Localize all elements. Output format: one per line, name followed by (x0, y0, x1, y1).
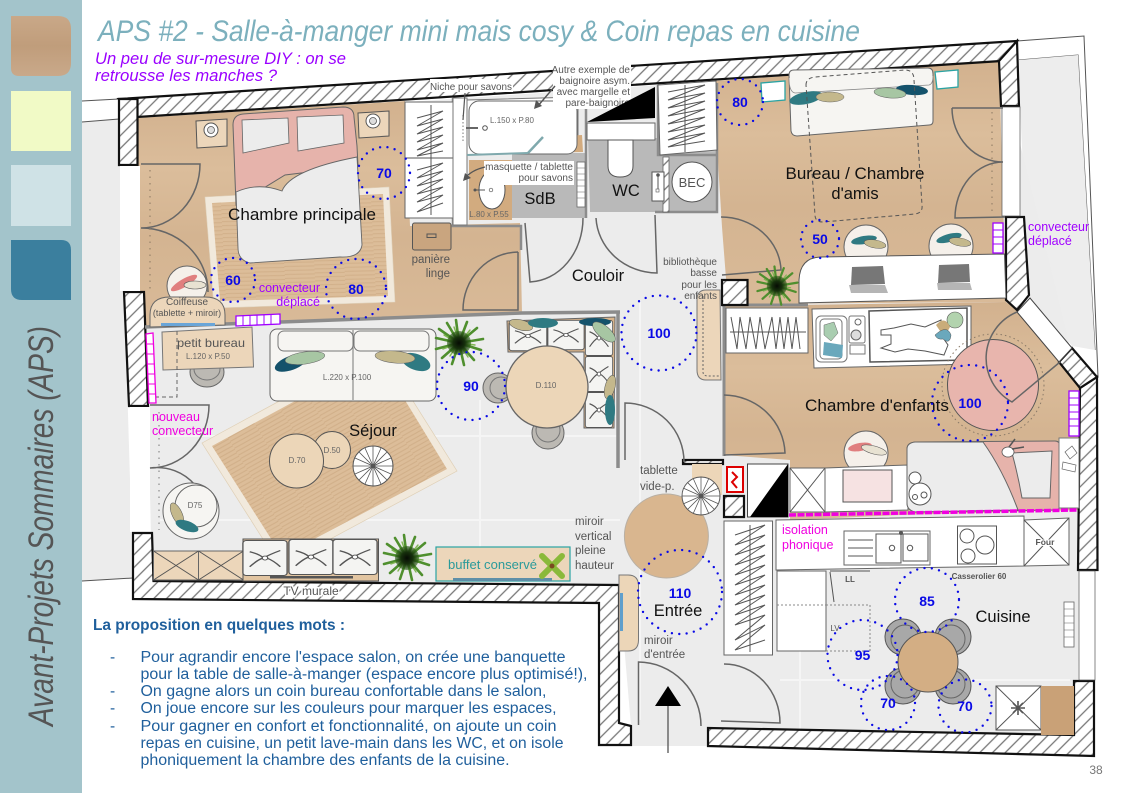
note: mirror (575, 516, 614, 572)
note: shelf (640, 465, 678, 493)
sidebar (0, 0, 82, 793)
note: other bathtub example: Autre exemple de (552, 65, 630, 76)
room label: Chambre principale (228, 206, 376, 224)
heading: La proposition en quelques mots : (93, 617, 345, 634)
list: Pour gagner en confort et fonctionnalité, on ajoute un coin (140, 718, 556, 735)
note: shelf: vide-p. (640, 481, 675, 493)
clearance 80 (717, 79, 763, 125)
exterior ground (82, 36, 1098, 581)
tall units (777, 571, 870, 651)
right wall (1078, 377, 1098, 570)
clearance 70: 70 (376, 165, 392, 181)
door to office (721, 217, 781, 275)
list: Pour agrandir encore l'espace salon, on crée une banquette (140, 649, 566, 666)
clearance 95: 95 (855, 647, 870, 663)
clearance 100 (932, 365, 1008, 441)
interior floor (140, 62, 1080, 746)
vertical section title: Avant-Projets Sommaires (APS) (22, 326, 61, 728)
list: - (110, 683, 115, 700)
WC (525, 81, 717, 282)
note: other bathtub example (534, 64, 631, 109)
round rug (624, 494, 708, 578)
left wall (124, 292, 148, 406)
dressing table: (tablette + miroir) (153, 308, 221, 318)
door to kitchen (721, 664, 780, 723)
clearance 85: 85 (919, 593, 935, 609)
note: bookcase: bibliothèque (663, 257, 717, 268)
note: mirror: hauteur (575, 560, 614, 572)
note: isolation (782, 523, 833, 552)
hob (958, 526, 996, 564)
pouf (353, 446, 393, 486)
note: moved convector (259, 281, 320, 309)
clearance 70 right (938, 680, 992, 732)
laundry basket (412, 223, 451, 280)
plant (757, 266, 797, 305)
oven (1024, 518, 1069, 566)
low bookcase (697, 290, 721, 380)
clearance 90 (437, 352, 505, 420)
note: other bathtub example: baignoire asym. (559, 76, 630, 87)
bathroom (430, 64, 631, 225)
note: isolation: phonique (782, 538, 833, 552)
clearance 70 left: 70 (880, 695, 896, 711)
closet (726, 308, 808, 353)
note: niche (430, 79, 513, 120)
sofa: L.220 x P.100 (323, 373, 372, 382)
TV bench (243, 539, 378, 581)
appliance marks: Casserolier 60 (952, 572, 1007, 581)
lower-left and bottom wall (133, 533, 631, 745)
room label: Chambre d'enfants (805, 397, 949, 415)
doors (952, 108, 1005, 218)
coffee table D50: D.50 (324, 446, 341, 455)
title: APS #2 - Salle-à-manger mini mais cosy & Coin repas en cuisine (96, 15, 860, 48)
room label: d'amis (831, 185, 879, 203)
proposal text block (93, 617, 588, 769)
list: On gagne alors un coin bureau confortable dans le salon, (140, 683, 546, 700)
wood floor: main bedroom (138, 101, 522, 327)
round rug (942, 334, 1044, 436)
sink (844, 531, 930, 565)
entry arrow (655, 686, 681, 753)
child bed (907, 441, 1060, 512)
diagonal wall (1059, 348, 1097, 388)
radiator (1064, 602, 1074, 647)
doors (141, 164, 208, 292)
internal partition (145, 312, 620, 327)
clearance 70 (358, 147, 410, 199)
small desk: petit bureau (177, 336, 245, 350)
ladder radiator (577, 162, 585, 207)
storage cabinets (154, 551, 244, 580)
list: - (110, 649, 115, 666)
note: bookcase: enfants (684, 291, 717, 302)
window door (986, 312, 1060, 402)
dining table (506, 346, 588, 428)
clearance 100: 100 (647, 325, 671, 341)
black shaft (587, 87, 655, 122)
appliance marks (830, 571, 1007, 633)
sideboard (436, 547, 570, 581)
wood cabinet (1041, 686, 1074, 735)
corridor (572, 217, 781, 380)
convector (1069, 391, 1079, 436)
subtitle (95, 50, 346, 85)
boiler unit (996, 686, 1041, 730)
dining chairs (885, 619, 971, 704)
small desk chair (190, 357, 224, 387)
colour swatch: pale yellow (11, 91, 71, 151)
walls (119, 41, 1098, 756)
clearance 100 (622, 296, 696, 370)
dashed desk footprint (155, 331, 177, 397)
small desk (161, 323, 254, 370)
colour swatch: deep blue (11, 240, 71, 300)
room label: Bureau / Chambre (786, 165, 924, 183)
armchair D75 (163, 483, 219, 539)
note: bookcase (663, 257, 717, 302)
dining chairs (483, 373, 564, 449)
grey tile floor: bathroom (512, 153, 587, 218)
grey tile floor: WC (588, 138, 717, 212)
clearance 110: 110 (669, 585, 692, 601)
list: phoniquement la chambre des enfants de la cuisine. (140, 752, 510, 769)
pouf (682, 477, 720, 515)
children's room (724, 306, 1079, 515)
right wall upper (1006, 217, 1029, 310)
shelf (692, 464, 722, 495)
fire/riser icon (727, 467, 743, 492)
fold-out outline (806, 70, 922, 222)
clearance 50 (801, 220, 839, 258)
plant (436, 320, 483, 365)
wood floor: children's room (724, 302, 1080, 520)
note: mirror: pleine (575, 545, 606, 557)
clearance 80: 80 (732, 94, 748, 110)
clearance 110 (638, 550, 722, 634)
oven: Four (1036, 537, 1055, 547)
note: bookcase: basse (690, 268, 717, 279)
page number: 38 (1089, 763, 1103, 777)
appliance marks: LL (845, 575, 855, 584)
note: shelf: tablette (640, 465, 678, 477)
note: moved convector: déplacé (1028, 234, 1072, 248)
note: moved convector: déplacé (276, 295, 320, 309)
note: soap shelf: pour savons (519, 173, 573, 184)
sideboard: buffet conservé (448, 558, 537, 572)
colour swatch: pale blue (11, 165, 71, 226)
coffee table D70 (270, 434, 324, 488)
sofa (270, 329, 436, 401)
list: repas en cuisine, un petit lave-main dans les WC, et on isole (140, 735, 564, 752)
subtitle: retrousse les manches ? (95, 67, 278, 85)
room label (786, 165, 924, 203)
note: moved convector (1028, 220, 1089, 248)
dressing table: Coiffeuse (166, 297, 208, 308)
bathtub: L.150 x P.80 (490, 116, 534, 125)
doors (150, 405, 209, 485)
chairs (844, 224, 973, 269)
clearance 85 (895, 568, 959, 632)
rug (202, 347, 457, 566)
list: On joue encore sur les couleurs pour marquer les espaces, (140, 700, 556, 717)
bathtub (453, 97, 583, 225)
desk chair (844, 431, 888, 475)
list: - (110, 718, 115, 735)
top-right wall (999, 41, 1019, 106)
mirror console (619, 575, 638, 651)
clearance 80 (326, 259, 386, 319)
closet (658, 81, 717, 155)
note: soap shelf: masquette / tablette (485, 162, 573, 173)
list (110, 649, 588, 769)
laundry basket: panière (412, 254, 450, 266)
hand basin (652, 157, 669, 212)
room label: WC (612, 182, 640, 200)
technical ducts (727, 464, 788, 517)
sink: L.80 x P.55 (469, 210, 509, 219)
clearance 80: 80 (348, 281, 364, 297)
side tables (761, 70, 958, 102)
entrance (575, 464, 780, 753)
acoustic isolation strip (789, 510, 1078, 515)
desk (790, 465, 908, 512)
note: niche: Niche pour savons (430, 82, 512, 93)
clearance 50: 50 (812, 231, 828, 247)
office (717, 68, 1089, 305)
corner bench (507, 317, 619, 428)
appliance marks: LV (830, 624, 840, 633)
note: entrance mirror (644, 635, 685, 661)
small desk: L.120 x P.50 (186, 352, 230, 361)
cistern (587, 123, 655, 140)
laundry basket: linge (426, 268, 450, 280)
desk with laptops (799, 254, 1006, 303)
closet (405, 102, 453, 218)
note: moved convector: convecteur (259, 281, 320, 295)
room label: Séjour (349, 422, 397, 440)
rug (205, 187, 395, 308)
armchair D75: D75 (188, 501, 203, 510)
counter (776, 516, 1024, 570)
moved convector (236, 314, 280, 326)
kitchen (724, 516, 1074, 735)
subtitle: Un peu de sur-mesure DIY : on se (95, 50, 346, 68)
colour swatch: wood (11, 16, 71, 76)
entrance door (638, 662, 701, 726)
note: other bathtub example: pare-baignoire (566, 98, 630, 109)
note: bookcase: pour les (681, 280, 717, 291)
sofa bed (788, 68, 933, 136)
loft unit (812, 306, 971, 368)
new convector (146, 333, 156, 403)
door to corridor (463, 252, 518, 310)
top-left wall (119, 99, 138, 165)
doors (525, 218, 583, 282)
dining table (898, 632, 958, 692)
note: new convector: nouveau (152, 410, 200, 424)
note: new convector (152, 410, 213, 438)
plant (384, 535, 431, 580)
note: entrance mirror: d'entrée (644, 649, 685, 661)
sink (469, 160, 512, 220)
note: mirror: miroir (575, 516, 604, 528)
list: - (110, 700, 115, 717)
note: moved convector: convecteur (1028, 220, 1089, 234)
note: entrance mirror: miroir (644, 635, 673, 647)
nightstands (196, 111, 389, 148)
main bedroom (141, 102, 518, 327)
closet (724, 521, 772, 655)
bottom right wall (708, 681, 1094, 756)
note: new convector: convecteur (152, 424, 213, 438)
TV label: TV murale (283, 584, 339, 598)
boiler: BEC (679, 175, 705, 190)
shelf with books (1059, 438, 1079, 508)
toilet (608, 140, 633, 177)
note: other bathtub example: avec margelle et (557, 87, 630, 98)
top wall (119, 41, 1017, 117)
note: isolation: isolation (782, 523, 828, 537)
room label: SdB (524, 190, 556, 208)
teddy bear (909, 472, 931, 505)
door to entrance (625, 403, 684, 462)
clearance 100: 100 (958, 395, 982, 411)
note: mirror: vertical (575, 531, 611, 543)
toy rabbit (1002, 439, 1024, 457)
door (724, 395, 785, 455)
dining table: D.110 (536, 381, 557, 390)
clearance 60 (211, 258, 255, 302)
coffee table D50 (314, 432, 350, 468)
window gap (120, 166, 140, 291)
clearance 70 left (861, 676, 915, 730)
wood floor: office (713, 61, 1006, 304)
dressing table (150, 266, 225, 327)
room label: Couloir (572, 267, 625, 285)
boiler (672, 162, 712, 202)
list: pour la table de salle-à-manger (espace encore plus optimisé!), (140, 666, 588, 683)
bed (233, 107, 362, 263)
clearance 95 (828, 620, 898, 690)
convector (993, 223, 1003, 253)
clearance 60: 60 (225, 272, 241, 288)
clearance 90: 90 (463, 378, 479, 394)
note: soap shelf (463, 161, 574, 185)
shaft (748, 464, 788, 517)
living room (146, 317, 684, 598)
clearance 70 right: 70 (957, 698, 973, 714)
room label: Cuisine (975, 608, 1031, 626)
coffee table D70: D.70 (289, 456, 306, 465)
room label: Entrée (654, 602, 702, 620)
